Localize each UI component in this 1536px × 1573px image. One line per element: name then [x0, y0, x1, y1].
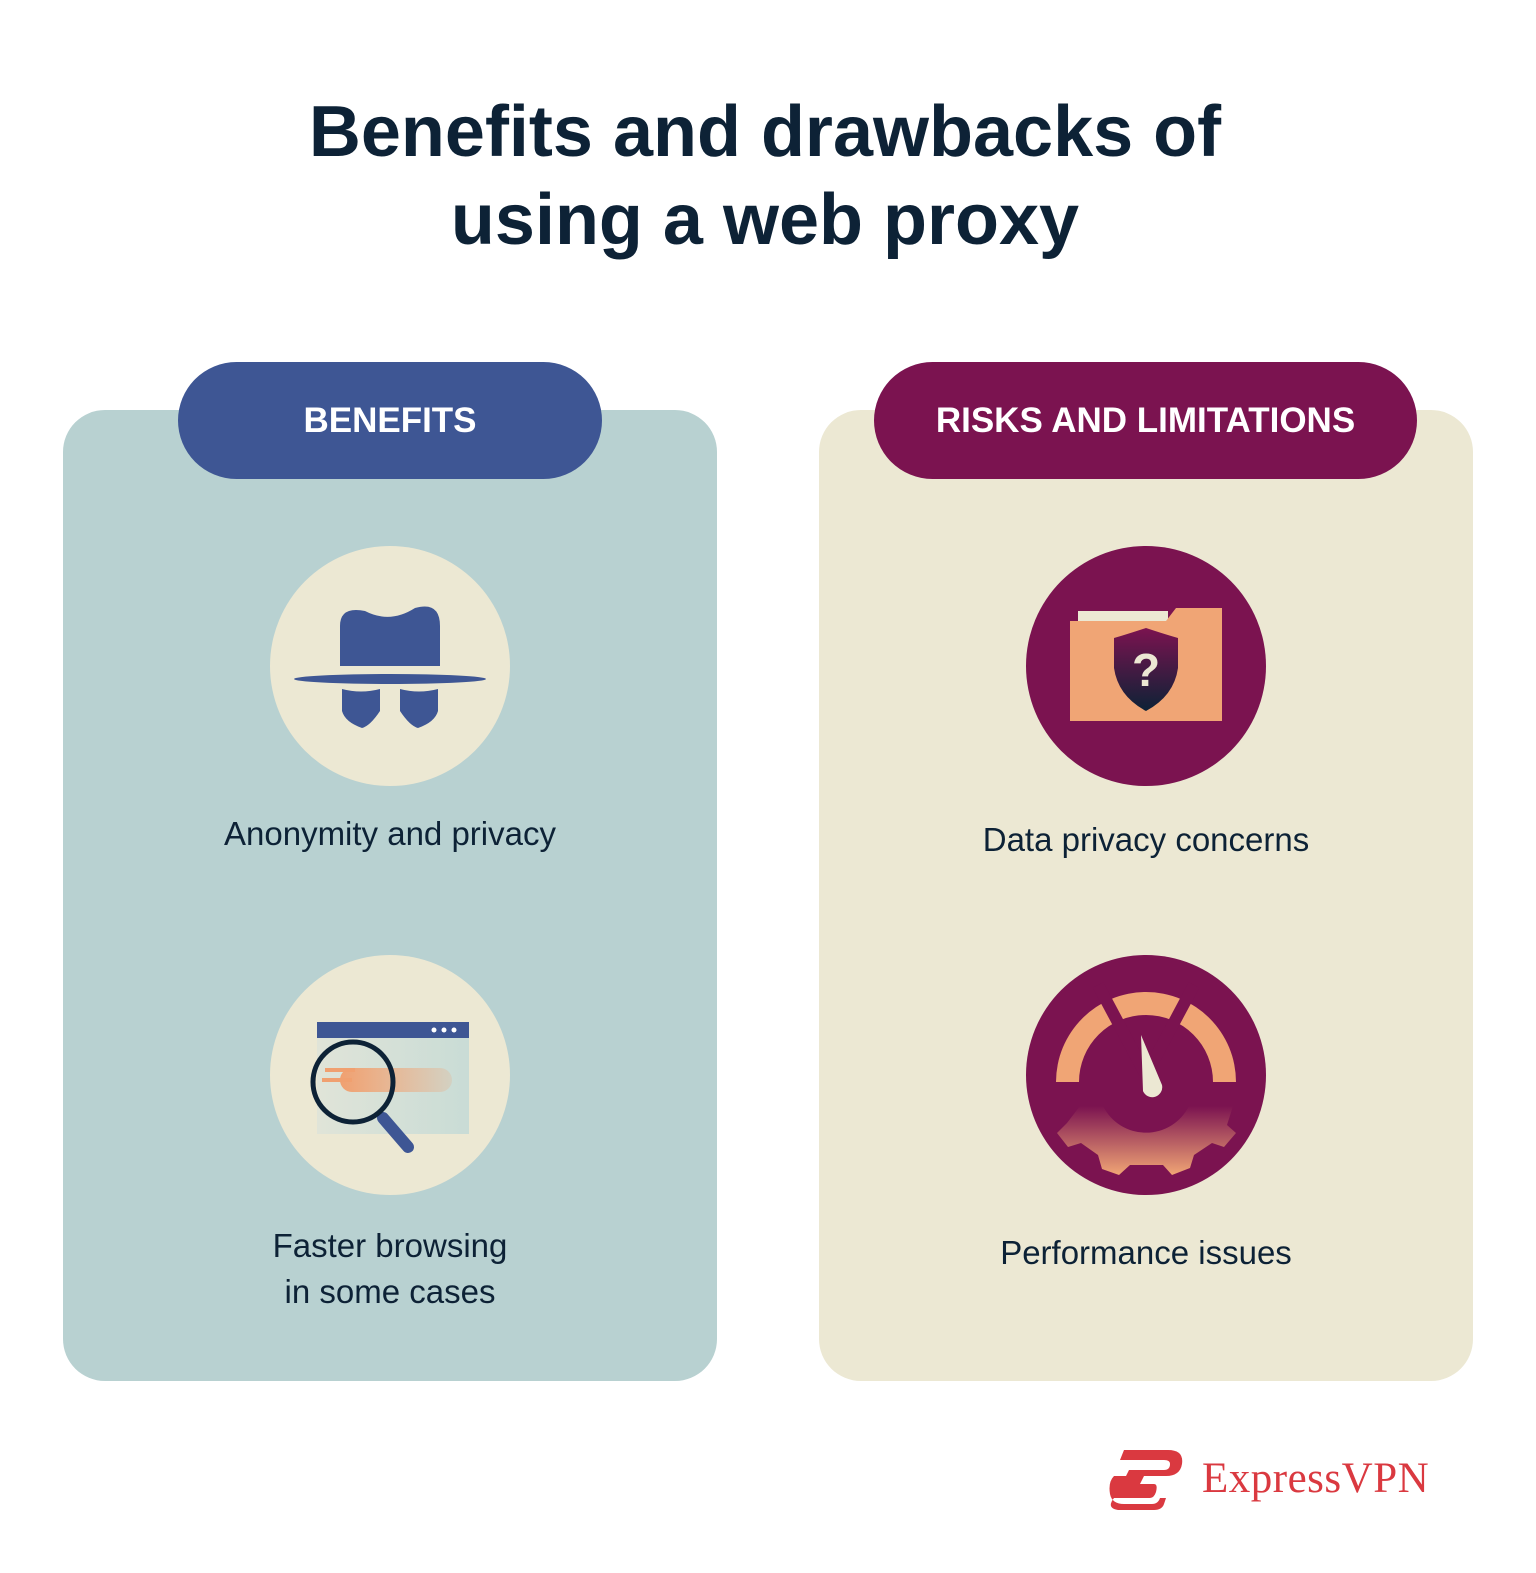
icon: speedometer gear: [1026, 955, 1266, 1195]
icon: hat and glasses: [270, 546, 510, 786]
title: Benefits and drawbacks of: [309, 92, 1221, 172]
title: using a web proxy: [451, 180, 1079, 260]
heading: benefits: BENEFITS: [303, 400, 477, 440]
logo: ExpressVPN: [1110, 1450, 1429, 1510]
label: faster browsing: Faster browsing: [273, 1227, 507, 1264]
heading: risks: [874, 362, 1417, 479]
icon: browser magnifier: [270, 955, 510, 1195]
heading: risks: RISKS AND LIMITATIONS: [936, 400, 1355, 440]
panel: risks: [819, 410, 1473, 1381]
label: data privacy: Data privacy concerns: [983, 821, 1309, 858]
icon: folder shield: ?: [1132, 644, 1160, 696]
title: [309, 92, 1222, 260]
heading: benefits: [178, 362, 602, 479]
icon: folder shield: [1026, 546, 1266, 786]
panel: benefits: [63, 410, 717, 1381]
label: performance: Performance issues: [1000, 1234, 1292, 1271]
label: faster browsing: [273, 1227, 507, 1310]
label: faster browsing: in some cases: [285, 1273, 495, 1310]
label: anonymity: Anonymity and privacy: [224, 815, 556, 852]
logo: ExpressVPN: ExpressVPN: [1202, 1455, 1429, 1502]
